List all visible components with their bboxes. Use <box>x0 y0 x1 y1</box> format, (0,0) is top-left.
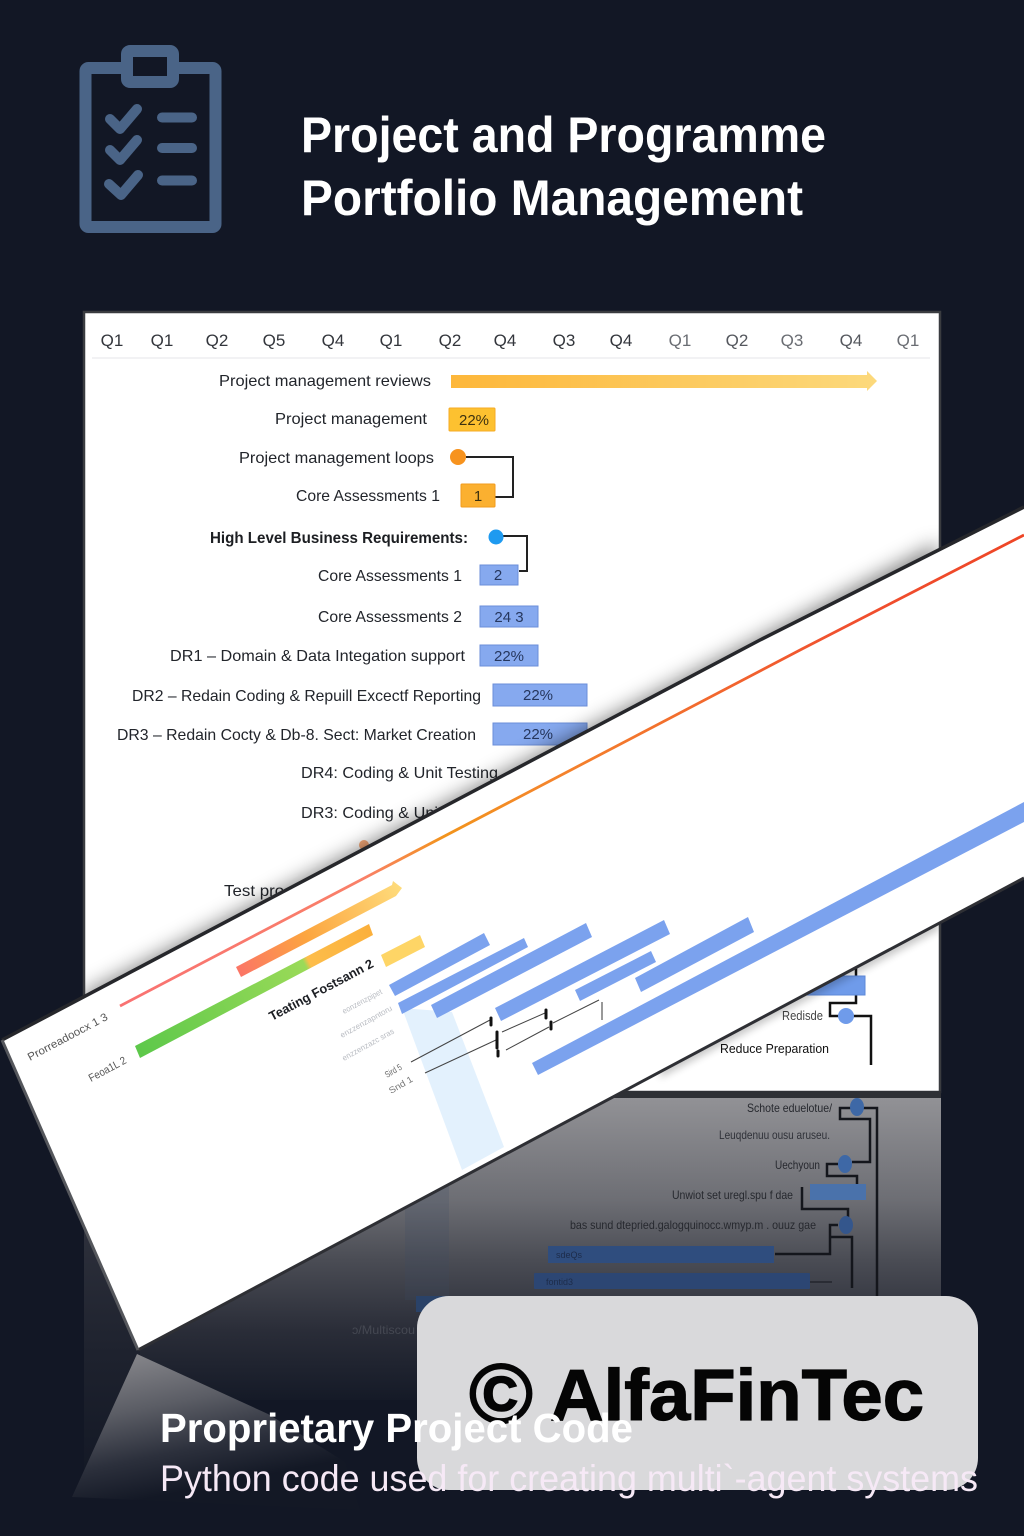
row: project management loops <box>239 449 513 497</box>
row: high level business requirements <box>210 530 527 571</box>
chart header quarters: Q2 <box>439 331 461 350</box>
row: core assessments 2: Core Assessments 2 <box>318 609 462 626</box>
row: core assessments 2 <box>318 606 538 627</box>
row: project management loops: Project management loops <box>239 450 434 467</box>
icon: clipboard checklist <box>86 51 216 227</box>
chart header quarters: Q3 <box>781 331 803 350</box>
row: lower right bar and connectors <box>720 960 871 1065</box>
rotated task labels: Prorreadoocx 1 3 <box>26 1011 110 1064</box>
row: project management: Project management <box>275 411 428 428</box>
reflected labels and bars: Uechyoun <box>775 1158 820 1172</box>
row: DR1 <box>170 645 538 666</box>
reflected labels and bars: Unwiot set uregl.spu f dae <box>672 1188 793 1202</box>
blue task bars <box>389 802 1024 1075</box>
row: DR2: 22% <box>523 687 553 704</box>
title <box>301 107 826 226</box>
footer subheading: Python code used for creating multi`-agent systems <box>160 1458 978 1499</box>
reflected labels and bars: ɔ/Multiscou <box>352 1323 415 1337</box>
chart header quarters: Q4 <box>610 331 632 350</box>
row: core assessments 1 blue: Core Assessments 1 <box>318 568 462 585</box>
chart header quarters: Q1 <box>380 331 402 350</box>
icon: copyright mark: © <box>469 1347 533 1441</box>
watermark card <box>417 1296 978 1490</box>
dependency lines and markers <box>411 1000 602 1073</box>
row: DR3 coding: DR3: Coding & Unit Testing <box>301 805 498 822</box>
row: core assessments 1 blue <box>318 565 518 585</box>
row: project management <box>275 408 495 431</box>
title: Project and Programme <box>301 107 826 163</box>
row: high level business requirements: High Level Business Requirements: <box>210 530 468 547</box>
row: DR3 market creation <box>117 723 587 745</box>
chart header quarters: Q4 <box>322 331 344 350</box>
row: DR1: 22% <box>494 648 524 665</box>
row: orange marker <box>359 840 369 850</box>
reflected labels and bars: bas sund dtepried.galogquinocc.wmyp.m . ouuz gae <box>570 1218 816 1232</box>
rotated task labels: Teating Fostsann 2 <box>266 956 376 1024</box>
critical path line <box>120 535 1024 1006</box>
green progress bar <box>135 924 373 1058</box>
panel: reflected corner wedge <box>72 1354 360 1510</box>
row: DR3 market creation: DR3 – Redain Cocty & Db-8. Sect: Market Creation <box>117 727 476 744</box>
rotated task labels: Sird 5 <box>383 1062 404 1080</box>
title: Portfolio Management <box>301 170 803 226</box>
chart header quarters: Q2 <box>726 331 748 350</box>
row: project management: 22% <box>459 412 489 429</box>
chart header quarters: Q4 <box>840 331 862 350</box>
highlight band <box>402 1008 504 1170</box>
brand name: AlfaFinTec <box>550 1356 924 1436</box>
chart header quarters: Q5 <box>263 331 285 350</box>
chart header quarters: Q3 <box>553 331 575 350</box>
panel: tilted Gantt sheet <box>2 507 1024 1350</box>
chart header quarters: Q2 <box>206 331 228 350</box>
yellow arrow bar <box>236 881 402 977</box>
reflected labels and bars: Leuqdenuu ousu aruseu. <box>719 1128 830 1142</box>
row: DR2: DR2 – Redain Coding & Repuill Excectf Reporting <box>132 688 481 705</box>
row: DR2 <box>132 684 587 706</box>
row: lower right bar and connectors: Redisde <box>782 1009 823 1023</box>
row: project management reviews <box>219 371 877 391</box>
rotated task labels: enzzenzapntoru <box>339 1004 394 1040</box>
footer heading: Proprietary Project Code <box>160 1405 633 1451</box>
chart header quarters: Q1 <box>101 331 123 350</box>
rotated task labels: eonzenzpipet <box>341 987 384 1016</box>
reflected labels and bars: fontid3 <box>546 1277 573 1287</box>
chart header quarters <box>101 331 919 350</box>
row: core assessments 1 blue: 2 <box>494 567 502 584</box>
chart header quarters: Q1 <box>151 331 173 350</box>
reflected labels and bars: sdeQs <box>556 1250 583 1260</box>
reflected band <box>405 1160 449 1300</box>
shadow of tilted sheet <box>84 543 939 1078</box>
rotated task labels: Feoa1L 2 <box>87 1055 129 1085</box>
row: core assessments 1 orange <box>296 484 495 507</box>
row: core assessments 1 orange: Core Assessments 1 <box>296 488 440 505</box>
chart header quarters: Q4 <box>494 331 516 350</box>
rotated task labels: enzzenzazc sras <box>341 1027 396 1063</box>
row: project management reviews: Project management reviews <box>219 373 431 390</box>
small yellow bar <box>381 935 425 967</box>
panel: reflected lower chart area <box>84 1097 941 1480</box>
panel: base Gantt chart <box>84 312 941 1098</box>
row: test label: Test process <box>224 883 319 900</box>
row: core assessments 1 orange: 1 <box>474 488 482 505</box>
row: DR4 coding: DR4: Coding & Unit Testing <box>301 765 498 782</box>
row: DR3 market creation: 22% <box>523 726 553 743</box>
row: DR1: DR1 – Domain & Data Integation support <box>170 648 466 665</box>
row: core assessments 2: 24 3 <box>494 609 524 626</box>
row: lower right bar and connectors: Reduce Preparation <box>720 1042 829 1056</box>
chart header quarters: Q1 <box>669 331 691 350</box>
reflected labels and bars <box>352 1098 877 1337</box>
reflected labels and bars: Schote eduelotue/ <box>747 1101 833 1115</box>
chart header quarters: Q1 <box>897 331 919 350</box>
rotated task labels: Snd 1 <box>387 1074 415 1096</box>
rotated task labels <box>26 956 415 1096</box>
